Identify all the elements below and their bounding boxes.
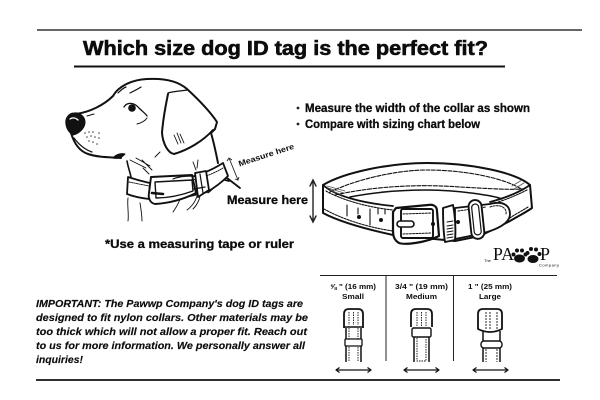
text block: important note: inquiries! — [36, 354, 83, 366]
label: measure here on collar: Measure here — [227, 193, 308, 207]
text block: important note — [36, 298, 308, 366]
logo: The Pawwp Company: The — [484, 258, 492, 263]
text block: important note: designed to fit nylon collars. Other materials may be — [36, 312, 308, 324]
label: measure here on neck: Measure here — [237, 142, 296, 168]
text block: important note: IMPORTANT: The Pawwp Company's dog ID tags are — [36, 298, 303, 310]
text block: important note: too thick which will not allow a proper fit. Reach out — [36, 326, 308, 338]
logo: The Pawwp Company — [484, 244, 559, 268]
logo: The Pawwp Company: PA — [493, 244, 514, 264]
size: small: ⅝ " (16 mm) — [330, 282, 377, 291]
size: large — [468, 282, 513, 372]
size: small: Small — [342, 292, 364, 301]
bullet list: instructions — [297, 101, 530, 131]
size: small — [330, 282, 377, 372]
size: large: 1 " (25 mm) — [468, 282, 513, 291]
size: medium — [395, 282, 449, 372]
bullet list: instructions: Compare with sizing chart below — [305, 117, 481, 131]
size: medium: Medium — [406, 292, 437, 301]
arrow: neck measure — [227, 158, 239, 180]
size: medium: 3/4 " (19 mm) — [395, 282, 449, 291]
sizing chart — [320, 275, 557, 372]
title: Which size dog ID tag is the perfect fit? — [83, 38, 488, 60]
logo: The Pawwp Company: P — [540, 244, 550, 264]
logo: The Pawwp Company: Company — [539, 262, 559, 268]
bullet list: instructions: Measure the width of the collar as shown — [305, 101, 530, 115]
icon: dog head with collar — [66, 79, 240, 221]
text block: important note: to us for more information. We personally answer all — [36, 340, 306, 352]
note: measuring tape: *Use a measuring tape or ruler — [105, 237, 294, 251]
icon: large collar — [323, 163, 532, 244]
arrow: collar width — [310, 180, 316, 222]
size: large: Large — [479, 292, 501, 301]
